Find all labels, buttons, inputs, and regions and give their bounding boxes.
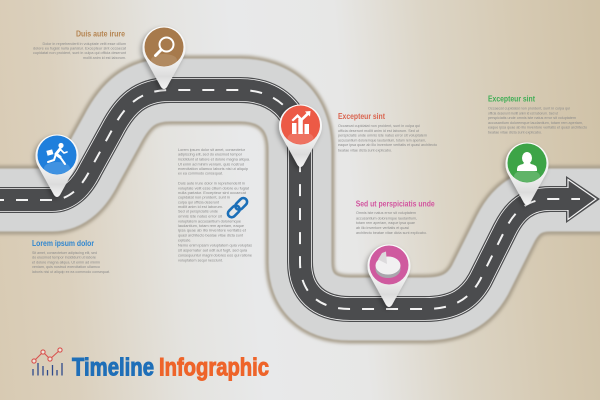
text block: green: eaque ipsa quae ab illo inventore veritatis et quasi architecto [488, 125, 587, 130]
icon: pie [376, 252, 400, 278]
text block: pink: Omnis iste natus error sit voluptatem [356, 210, 416, 215]
text block: center column [178, 147, 252, 262]
heading: Excepteur sint green: Excepteur sint [488, 94, 535, 104]
text block: center column: adipiscing elit, sed do eiusmod tempor [178, 152, 243, 157]
text block: center column: voluptatem accusantium doloremque [178, 218, 241, 223]
text block: pink [356, 210, 427, 235]
heading: Lorem ipsum dolor: Lorem ipsum dolor [32, 239, 94, 248]
heading: Excepteur sint red: Excepteur sint [338, 112, 385, 121]
text block: pink: architecto beatae vitae dicta sunt explicabo. [356, 230, 427, 235]
logo icon: mini chart [32, 348, 62, 376]
text block: red: Occaecat cupidatat non proident, sunt in culpa qui [338, 123, 420, 128]
text block: Duis: Dolor in reprehenderit in voluptate velit esse cillum [42, 41, 126, 46]
text block: green [488, 106, 587, 135]
pin 3: red chart [279, 104, 322, 167]
text block: green: officia deserunt mollit anim id est laborum. Sed ut [488, 110, 559, 115]
text block: center column: exercitation ullamco laboris nisi ut aliquip [178, 166, 248, 171]
icon: runner [46, 143, 67, 164]
text block: center column: Duis aute irure dolor in reprehenderit in [178, 181, 245, 186]
text block: center column: quasi architecto beatae vitae dicta sunt [178, 233, 244, 238]
text block: center column: mollit anim id est laborum. [178, 204, 223, 209]
text block: pink: accusantium doloremque laudantium, [356, 215, 417, 220]
text block: center column: laudantium, totam rem aperiam, eaque [178, 223, 244, 228]
text block: Lorem: et dolore magna aliqua. Ut enim ad minim [32, 259, 100, 264]
text block: red: beatae vitae dicta sunt explicabo. [338, 147, 392, 152]
title: Timeline [72, 354, 154, 382]
text block: center column: sit aspernatur aut odit aut fugit, sed quia [178, 248, 248, 253]
pin 1: blue runner [36, 134, 78, 197]
text block: center column: Lorem ipsum dolor sit amet, consectetur [178, 147, 246, 152]
text block: red: eaque ipsa quae ab illo inventore veritatis et quasi architecto [338, 142, 437, 147]
text block: Lorem: laboris nisi ut aliquip ex ea commodo consequat. [32, 269, 110, 274]
text block: center column: nulla pariatur. Excepteur sint occaecat [178, 190, 247, 195]
text block: Lorem [32, 250, 110, 274]
text block: red: perspiciatis unde omnis iste natus error sit voluptatem [338, 132, 427, 137]
heading: Sed ut perspiciatis unde: Sed ut perspiciatis unde [356, 199, 435, 208]
text block: Lorem: do eiusmod tempor incididunt ut labore [32, 255, 96, 260]
text block: green: perspiciatis unde omnis iste natus error sit voluptatem [488, 115, 576, 120]
text block: center column: Sed ut perspiciatis unde [178, 209, 218, 214]
icon: magnifier [156, 38, 174, 56]
text block: red: accusantium doloremque laudantium, totam rem aperiam, [338, 137, 426, 142]
text block: Lorem: Sit amet, consectetuer adipiscing elit, sed [32, 250, 97, 255]
text block: green: Occaecat cupidatat non proident, sunt in culpa qui [488, 106, 570, 111]
text block: center column: consequuntur magni dolores eos qui ratione [178, 252, 252, 257]
text block: center column: ex ea commodo consequat. [178, 171, 223, 176]
road band [0, 90, 600, 309]
text block: pink: ab illo inventore veritatis et quasi [356, 225, 409, 230]
pin 4: pink pie [368, 244, 410, 307]
road [0, 90, 600, 309]
title [72, 354, 269, 382]
text block: red: officia deserunt mollit anim id est laborum. Sed ut [338, 128, 420, 133]
text block: center column: explicabo. [178, 237, 191, 242]
icon: bars and arrow [292, 111, 310, 134]
text block: Duis: cupidatat non proident, sunt in culpa qui officia deserunt [33, 50, 127, 55]
text block: Duis: dolore eu fugiat nulla pariatur. Excepteur sint occaecat [33, 46, 127, 50]
icon: chain link [226, 197, 249, 219]
text block: Duis: mollit anim id est laborum. [83, 55, 126, 60]
heading: Duis aute irure: Duis aute irure [76, 30, 125, 38]
text block: Duis [33, 41, 127, 60]
text block: center column: ipsa quae ab illo inventore veritatis et [178, 228, 247, 233]
text block: center column: culpa qui officia deserunt [178, 199, 220, 204]
text block: red [338, 123, 437, 152]
text block: center column: Ut enim ad minim veniam, quis nostrud [178, 161, 244, 166]
text block: center column: Nemo enim ipsam voluptatem quia voluptas [178, 243, 252, 248]
icon: person [517, 152, 537, 171]
text block: center column: voluptatem sequi nesciunt. [178, 257, 223, 262]
pin 2: brown magnifier [142, 26, 186, 89]
text block: green: accusantium doloremque laudantium, totam rem aperiam, [488, 120, 583, 125]
text block: Lorem: veniam, quis nostrud exercitation ullamco [32, 264, 100, 269]
text block: center column: omnis iste natus error sit [178, 214, 223, 219]
text block: center column: cupidatat non proident, sunt in [178, 195, 230, 200]
pin 5: green person [506, 142, 548, 205]
text block: center column: voluptate velit esse cillum dolore eu fugiat [178, 185, 250, 190]
text block: center column: incididunt ut labore et dolore magna aliqua. [178, 156, 250, 162]
title: Infographic [159, 354, 269, 382]
text block: green: beatae vitae dicta sunt explicabo. [488, 130, 542, 135]
text block: pink: totam rem aperiam, eaque ipsa quae [356, 220, 415, 225]
